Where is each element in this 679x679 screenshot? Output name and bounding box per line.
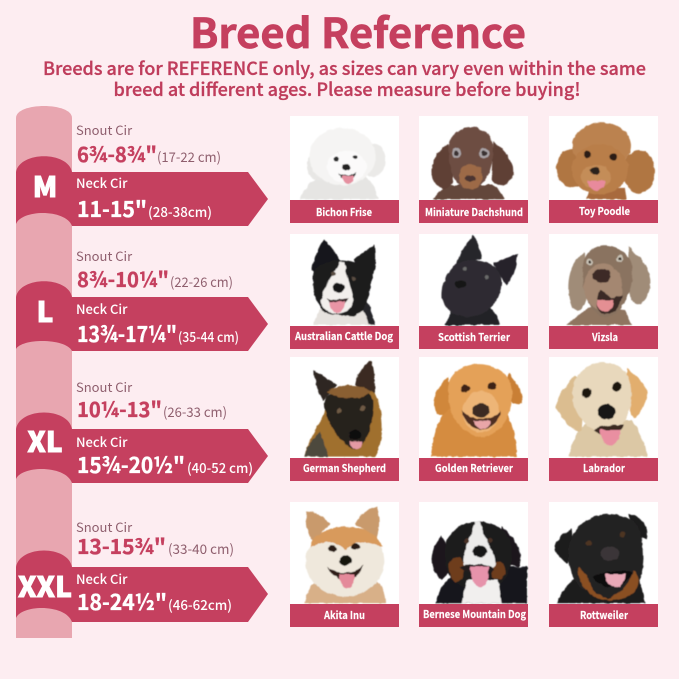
card: Australian Cattle Dog bbox=[290, 234, 399, 349]
subtitle bbox=[43, 55, 646, 102]
name: Toy Poodle: Toy Poodle bbox=[579, 204, 630, 219]
neck value XL: (40-52 cm) bbox=[187, 457, 253, 477]
letter XXL: XXL bbox=[18, 566, 72, 606]
letter XL: XL bbox=[27, 421, 63, 461]
photo: Miniature Dachshund bbox=[431, 127, 513, 199]
size column bbox=[16, 106, 72, 638]
photo: Scottish Terrier bbox=[442, 235, 518, 325]
subtitle: Breeds are for REFERENCE only, as sizes can vary even within the same bbox=[43, 55, 646, 81]
card: Labrador bbox=[549, 357, 658, 481]
snout value XXL bbox=[77, 531, 234, 561]
name: Australian Cattle Dog: Australian Cattle Dog bbox=[294, 329, 394, 344]
neck value L: 13¾-17¼" bbox=[77, 317, 177, 349]
photo: Rottweiler bbox=[555, 513, 647, 603]
snout L: Snout Cir bbox=[76, 246, 133, 265]
subtitle: breed at different ages. Please measure before buying! bbox=[114, 76, 580, 102]
name: Vizsla: Vizsla bbox=[591, 330, 618, 345]
snout XXL: Snout Cir bbox=[76, 517, 133, 536]
neck value M: (28-38cm) bbox=[148, 201, 212, 221]
size M bbox=[16, 120, 268, 226]
name: Rottweiler: Rottweiler bbox=[580, 608, 628, 623]
name: German Shepherd: German Shepherd bbox=[303, 461, 386, 476]
card: Vizsla bbox=[549, 234, 658, 349]
neck value L: (35-44 cm) bbox=[178, 326, 239, 346]
snout value XXL: 13-15¾" bbox=[77, 531, 166, 561]
size XXL bbox=[16, 517, 268, 622]
snout XL: Snout Cir bbox=[76, 377, 133, 396]
neck L: Neck Cir bbox=[76, 299, 128, 318]
badge and arrow XL bbox=[16, 412, 268, 483]
snout value M: (17-22 cm) bbox=[157, 146, 221, 166]
snout value XXL: (33-40 cm) bbox=[168, 538, 234, 558]
neck value XL bbox=[77, 448, 253, 480]
letter L: L bbox=[37, 291, 53, 331]
title: Breed Reference bbox=[190, 0, 526, 60]
photo: German Shepherd bbox=[304, 360, 382, 457]
neck value XXL: (46-62cm) bbox=[168, 594, 232, 614]
neck value XL: 15¾-20½" bbox=[77, 448, 185, 480]
photo: Akita Inu bbox=[304, 506, 386, 603]
card: Scottish Terrier bbox=[419, 234, 528, 349]
snout value L bbox=[77, 264, 233, 294]
neck value L bbox=[77, 317, 239, 349]
snout value M: 6¾-8¾" bbox=[77, 139, 157, 169]
snout M: Snout Cir bbox=[76, 120, 133, 139]
card: Miniature Dachshund bbox=[419, 116, 528, 223]
photo: Australian Cattle Dog bbox=[312, 239, 375, 325]
badge and arrow XXL bbox=[16, 550, 268, 622]
neck value XXL bbox=[77, 585, 232, 617]
neck M: Neck Cir bbox=[76, 173, 128, 192]
snout value L: 8¾-10¼" bbox=[77, 264, 169, 294]
name: Bernese Mountain Dog: Bernese Mountain Dog bbox=[423, 607, 527, 622]
photo: Toy Poodle bbox=[556, 123, 655, 199]
snout value L: (22-26 cm) bbox=[170, 271, 233, 291]
name: Bichon Frise: Bichon Frise bbox=[316, 205, 372, 220]
snout value XL: (26-33 cm) bbox=[163, 401, 227, 421]
size L bbox=[16, 246, 268, 351]
photo: Golden Retriever bbox=[431, 364, 522, 457]
photo: Bernese Mountain Dog bbox=[432, 522, 527, 603]
card: Akita Inu bbox=[290, 502, 399, 627]
neck value XXL: 18-24½" bbox=[77, 585, 167, 617]
neck value M bbox=[77, 192, 212, 224]
name: Miniature Dachshund: Miniature Dachshund bbox=[425, 205, 523, 220]
neck XL: Neck Cir bbox=[76, 432, 128, 451]
name: Akita Inu: Akita Inu bbox=[323, 608, 365, 623]
snout value XL bbox=[77, 394, 227, 424]
name: Labrador: Labrador bbox=[583, 461, 625, 476]
name: Golden Retriever: Golden Retriever bbox=[435, 461, 513, 476]
card: Rottweiler bbox=[549, 502, 658, 627]
badge and arrow M bbox=[16, 156, 268, 226]
card: Toy Poodle bbox=[549, 116, 658, 223]
photo: Labrador bbox=[556, 362, 647, 457]
photo: Bichon Frise bbox=[300, 128, 386, 199]
neck XXL: Neck Cir bbox=[76, 569, 128, 588]
photo: Vizsla bbox=[567, 245, 650, 325]
card: Golden Retriever bbox=[419, 357, 528, 481]
neck value M: 11-15" bbox=[77, 192, 147, 224]
card: Bernese Mountain Dog bbox=[419, 502, 528, 627]
snout value XL: 10¼-13" bbox=[77, 394, 162, 424]
size XL bbox=[16, 377, 268, 483]
card: Bichon Frise bbox=[290, 116, 399, 223]
card: German Shepherd bbox=[290, 357, 399, 481]
snout value M bbox=[77, 139, 221, 169]
badge and arrow L bbox=[16, 281, 268, 351]
letter M: M bbox=[33, 166, 57, 206]
name: Scottish Terrier: Scottish Terrier bbox=[438, 330, 510, 345]
